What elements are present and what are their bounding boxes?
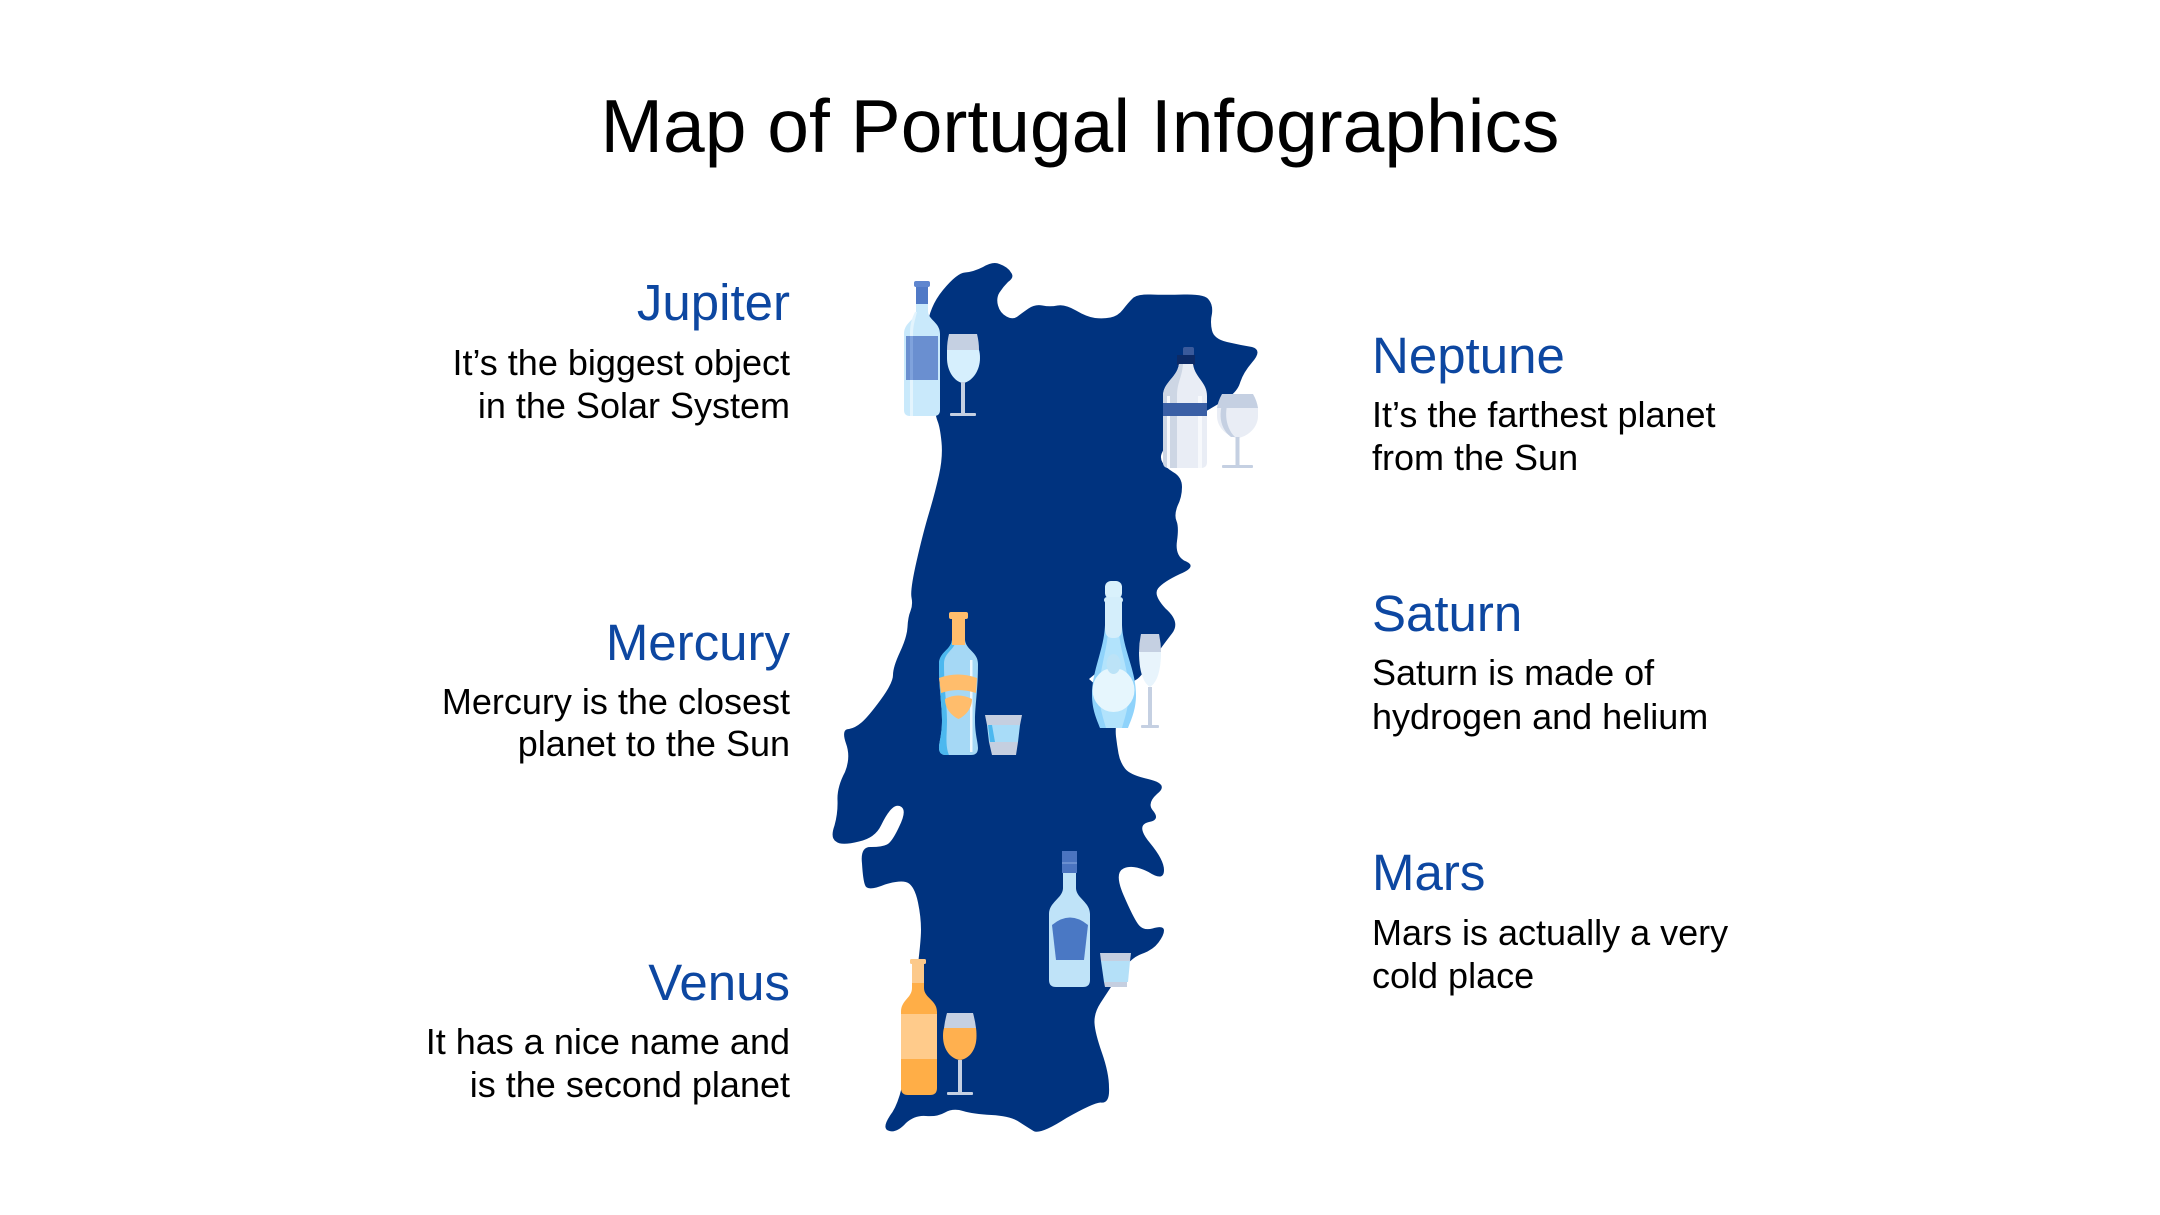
icon: orange bottle and wine glass xyxy=(901,959,976,1095)
text block: Saturn xyxy=(1372,585,1708,737)
icon: blue label bottle and shot glass xyxy=(1049,851,1131,987)
description: Saturn: hydrogen and helium xyxy=(1372,696,1708,737)
text block: Neptune xyxy=(1372,327,1716,478)
text block: Mars xyxy=(1372,844,1728,996)
icon: champagne bottle and flute xyxy=(1089,581,1161,728)
icon: white bottle and wine glass xyxy=(1163,347,1258,468)
icon: blue bottle and wine glass xyxy=(904,281,980,416)
description: Neptune: from the Sun xyxy=(1372,437,1578,478)
heading: Jupiter: Jupiter xyxy=(637,274,790,331)
text block: Venus xyxy=(426,954,790,1105)
heading: Neptune: Neptune xyxy=(1372,327,1565,384)
description: Mercury: Mercury is the closest xyxy=(442,681,790,722)
description: Saturn: Saturn is made of xyxy=(1372,652,1655,693)
heading: Saturn: Saturn xyxy=(1372,585,1522,642)
description: Jupiter: in the Solar System xyxy=(478,385,790,426)
text block: Jupiter xyxy=(452,274,790,426)
map of Portugal xyxy=(833,263,1258,1132)
title: Map of Portugal Infographics xyxy=(601,84,1559,168)
description: Mars: cold place xyxy=(1372,955,1534,996)
description: Venus: It has a nice name and xyxy=(426,1021,790,1062)
text block: Mercury xyxy=(442,614,790,764)
icon: blue bottle with orange label and tumbler xyxy=(939,612,1022,755)
description: Mercury: planet to the Sun xyxy=(518,723,790,764)
description: Mars: Mars is actually a very xyxy=(1372,912,1728,953)
description: Neptune: It’s the farthest planet xyxy=(1372,394,1716,435)
heading: Venus: Venus xyxy=(648,954,790,1011)
heading: Mercury: Mercury xyxy=(606,614,790,671)
description: Venus: is the second planet xyxy=(470,1064,790,1105)
heading: Mars: Mars xyxy=(1372,844,1485,901)
description: Jupiter: It’s the biggest object xyxy=(452,342,790,383)
